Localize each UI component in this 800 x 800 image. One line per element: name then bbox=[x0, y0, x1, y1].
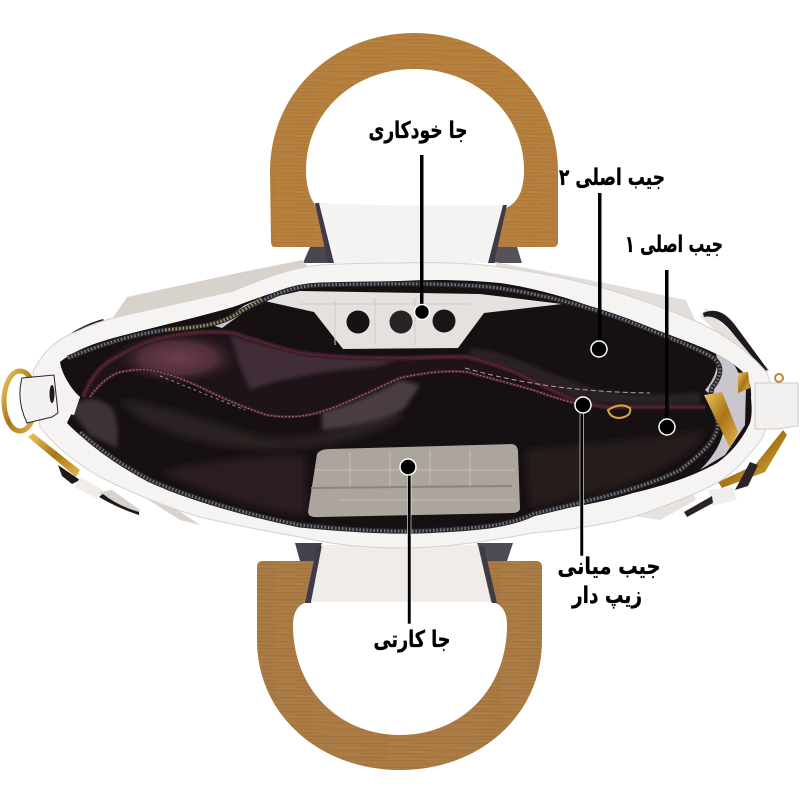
card holder bbox=[308, 444, 520, 517]
right buckle bbox=[755, 374, 798, 429]
lining: purple middle pocket bbox=[85, 331, 585, 416]
label: main pocket 2: جیب اصلی ۲ bbox=[559, 165, 665, 191]
label: middle pocket line 2: زیپ دار bbox=[571, 583, 642, 609]
outer crocodile leather panels bbox=[110, 260, 696, 525]
lining lower sheen bbox=[70, 399, 118, 448]
bag interior bbox=[50, 270, 760, 540]
bag white rim bbox=[33, 263, 775, 548]
label: card holder: جا کارتی bbox=[374, 627, 450, 653]
top wooden handle bbox=[270, 33, 558, 247]
label: pen holder: جا خودکاری bbox=[368, 118, 468, 144]
bottom strap bbox=[295, 543, 513, 603]
right straps bbox=[684, 308, 787, 517]
left end notch bbox=[57, 388, 80, 415]
callout: main pocket 2 bbox=[591, 193, 607, 357]
zipper pulls bbox=[608, 372, 750, 448]
label: middle pocket line 1: جیب میانی bbox=[558, 554, 660, 580]
callout: zippered middle pocket bbox=[575, 397, 591, 556]
lining highlight bbox=[124, 336, 232, 381]
maroon zippers bbox=[83, 332, 705, 417]
label: main pocket 1: جیب اصلی ۱ bbox=[625, 232, 723, 258]
pen holder panel bbox=[260, 291, 562, 349]
callout: pen holder bbox=[414, 155, 430, 320]
callout: main pocket 1 bbox=[659, 270, 675, 435]
callout: card holder bbox=[400, 459, 416, 624]
top strap bbox=[303, 203, 522, 263]
lower left straps bbox=[28, 319, 140, 515]
silver outer zipper bbox=[68, 284, 720, 531]
left buckle bbox=[4, 371, 58, 431]
bottom wooden handle bbox=[257, 561, 542, 770]
